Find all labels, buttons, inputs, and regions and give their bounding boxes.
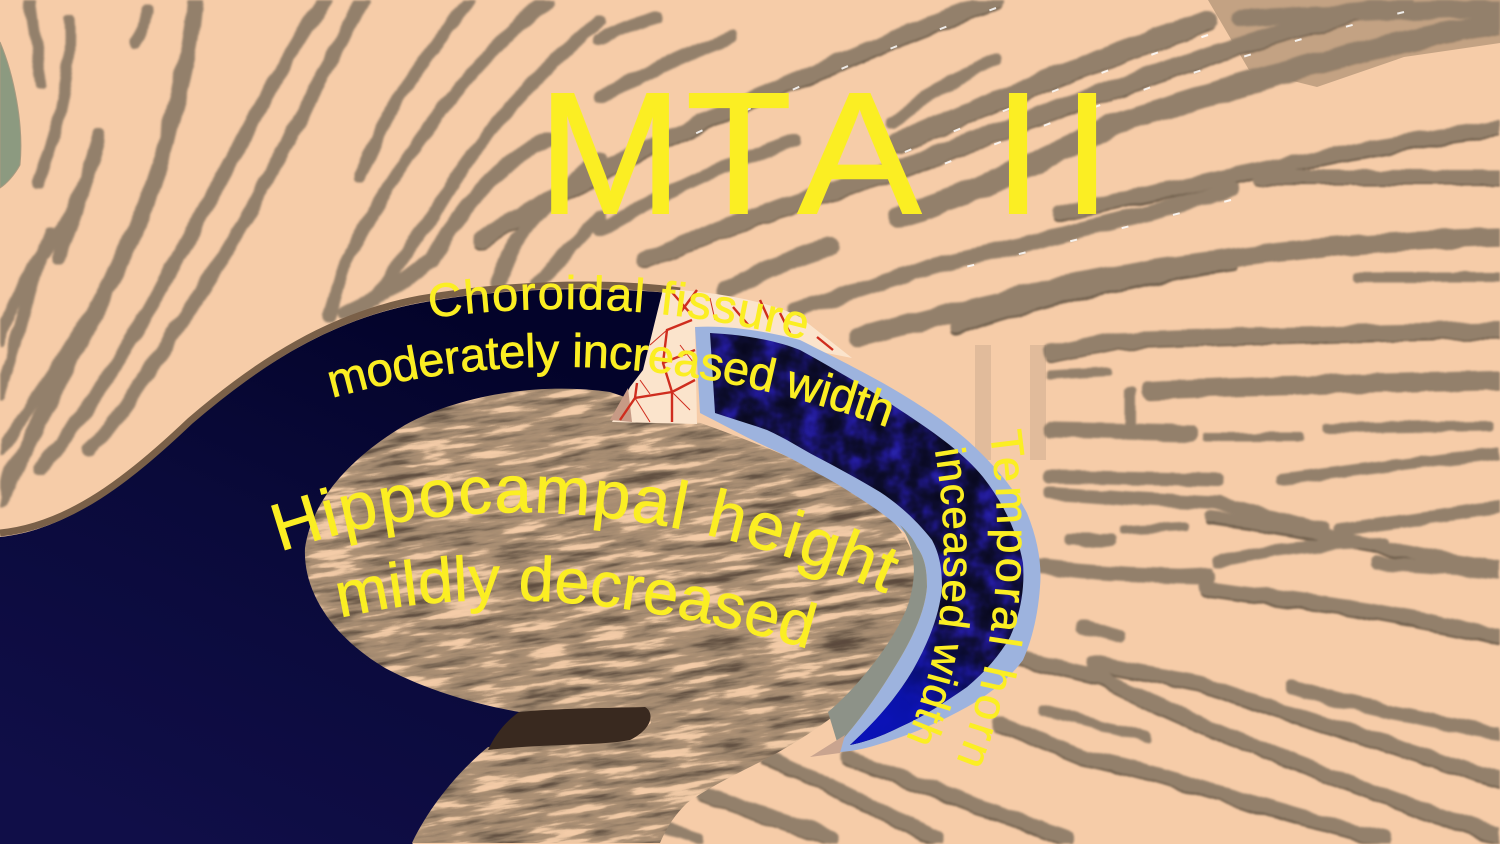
horn lumen bbox=[700, 325, 1035, 750]
title: II bbox=[994, 56, 1111, 250]
title: A bbox=[798, 56, 922, 250]
cortex edge above dark space bbox=[0, 285, 680, 533]
horn tip bbox=[810, 735, 845, 757]
background: white specular highlights bbox=[686, 8, 1404, 272]
panel: temporal horn bbox=[695, 325, 1040, 757]
title: MT bbox=[538, 56, 792, 250]
label: inceased width: inceased width bbox=[906, 448, 970, 744]
label: choroidal fissure: Choroidal fissure bbox=[430, 274, 807, 338]
hippocampal lining bbox=[828, 525, 927, 745]
label: temporal horn: Temporal horn bbox=[957, 428, 1024, 766]
title bbox=[538, 56, 1111, 250]
label: moderately increased width: moderately increased width bbox=[328, 332, 892, 427]
sulcus: dark brown notch bbox=[488, 707, 651, 750]
label: hippocampal height: Hippocampal height bbox=[271, 476, 900, 594]
icon: brain lobule at left edge bbox=[0, 42, 21, 188]
label: mildly decreased: mildly decreased bbox=[337, 554, 818, 648]
ghost letters: faint II bbox=[975, 345, 1046, 460]
panel: hippocampus texture bbox=[305, 389, 917, 843]
horn wall bbox=[695, 327, 1040, 752]
background: top-right shaded wedge bbox=[1208, 0, 1500, 87]
panel: dark CSF space bbox=[0, 289, 690, 844]
panel: choroid vessels bbox=[610, 289, 852, 424]
